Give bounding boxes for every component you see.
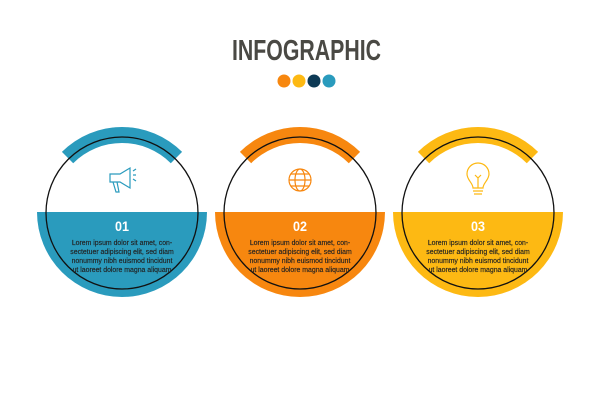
icon: globe [289, 169, 311, 191]
title: INFOGRAPHIC [232, 35, 381, 67]
text block: Lorem ipsum dolor sit amet, con- [250, 240, 350, 247]
text block: sectetuer adipiscing elit, sed diam [426, 249, 530, 256]
text block: Lorem ipsum dolor sit amet, con- [72, 240, 172, 247]
icon: megaphone [110, 168, 136, 192]
text block: ut laoreet dolore magna aliquam [429, 267, 528, 274]
bottom half disk [393, 212, 563, 297]
text block: sectetuer adipiscing elit, sed diam [248, 249, 352, 256]
panel: 02 [215, 127, 385, 297]
text block [70, 240, 174, 274]
color dots [278, 74, 336, 88]
panel: 03 [393, 127, 563, 297]
text block: Lorem ipsum dolor sit amet, con- [428, 240, 528, 247]
icon: light bulb [467, 163, 489, 194]
top arc band [62, 127, 182, 163]
text block [426, 240, 530, 274]
number: 02 [293, 218, 307, 234]
text block [248, 240, 352, 274]
text block: ut laoreet dolore magna aliquam [73, 267, 172, 274]
text block: ut laoreet dolore magna aliquam [251, 267, 350, 274]
panel: 01 [37, 127, 207, 297]
bottom half disk [37, 212, 207, 297]
outline circle [402, 137, 554, 289]
text block: sectetuer adipiscing elit, sed diam [70, 249, 174, 256]
outline circle [224, 137, 376, 289]
text block: nonummy nibh euismod tincidunt [250, 258, 350, 265]
outline circle [46, 137, 198, 289]
text block: nonummy nibh euismod tincidunt [72, 258, 172, 265]
text block: nonummy nibh euismod tincidunt [428, 258, 528, 265]
top arc band [240, 127, 360, 163]
number: 03 [471, 218, 485, 234]
bottom half disk [215, 212, 385, 297]
top arc band [418, 127, 538, 163]
number: 01 [115, 218, 129, 234]
